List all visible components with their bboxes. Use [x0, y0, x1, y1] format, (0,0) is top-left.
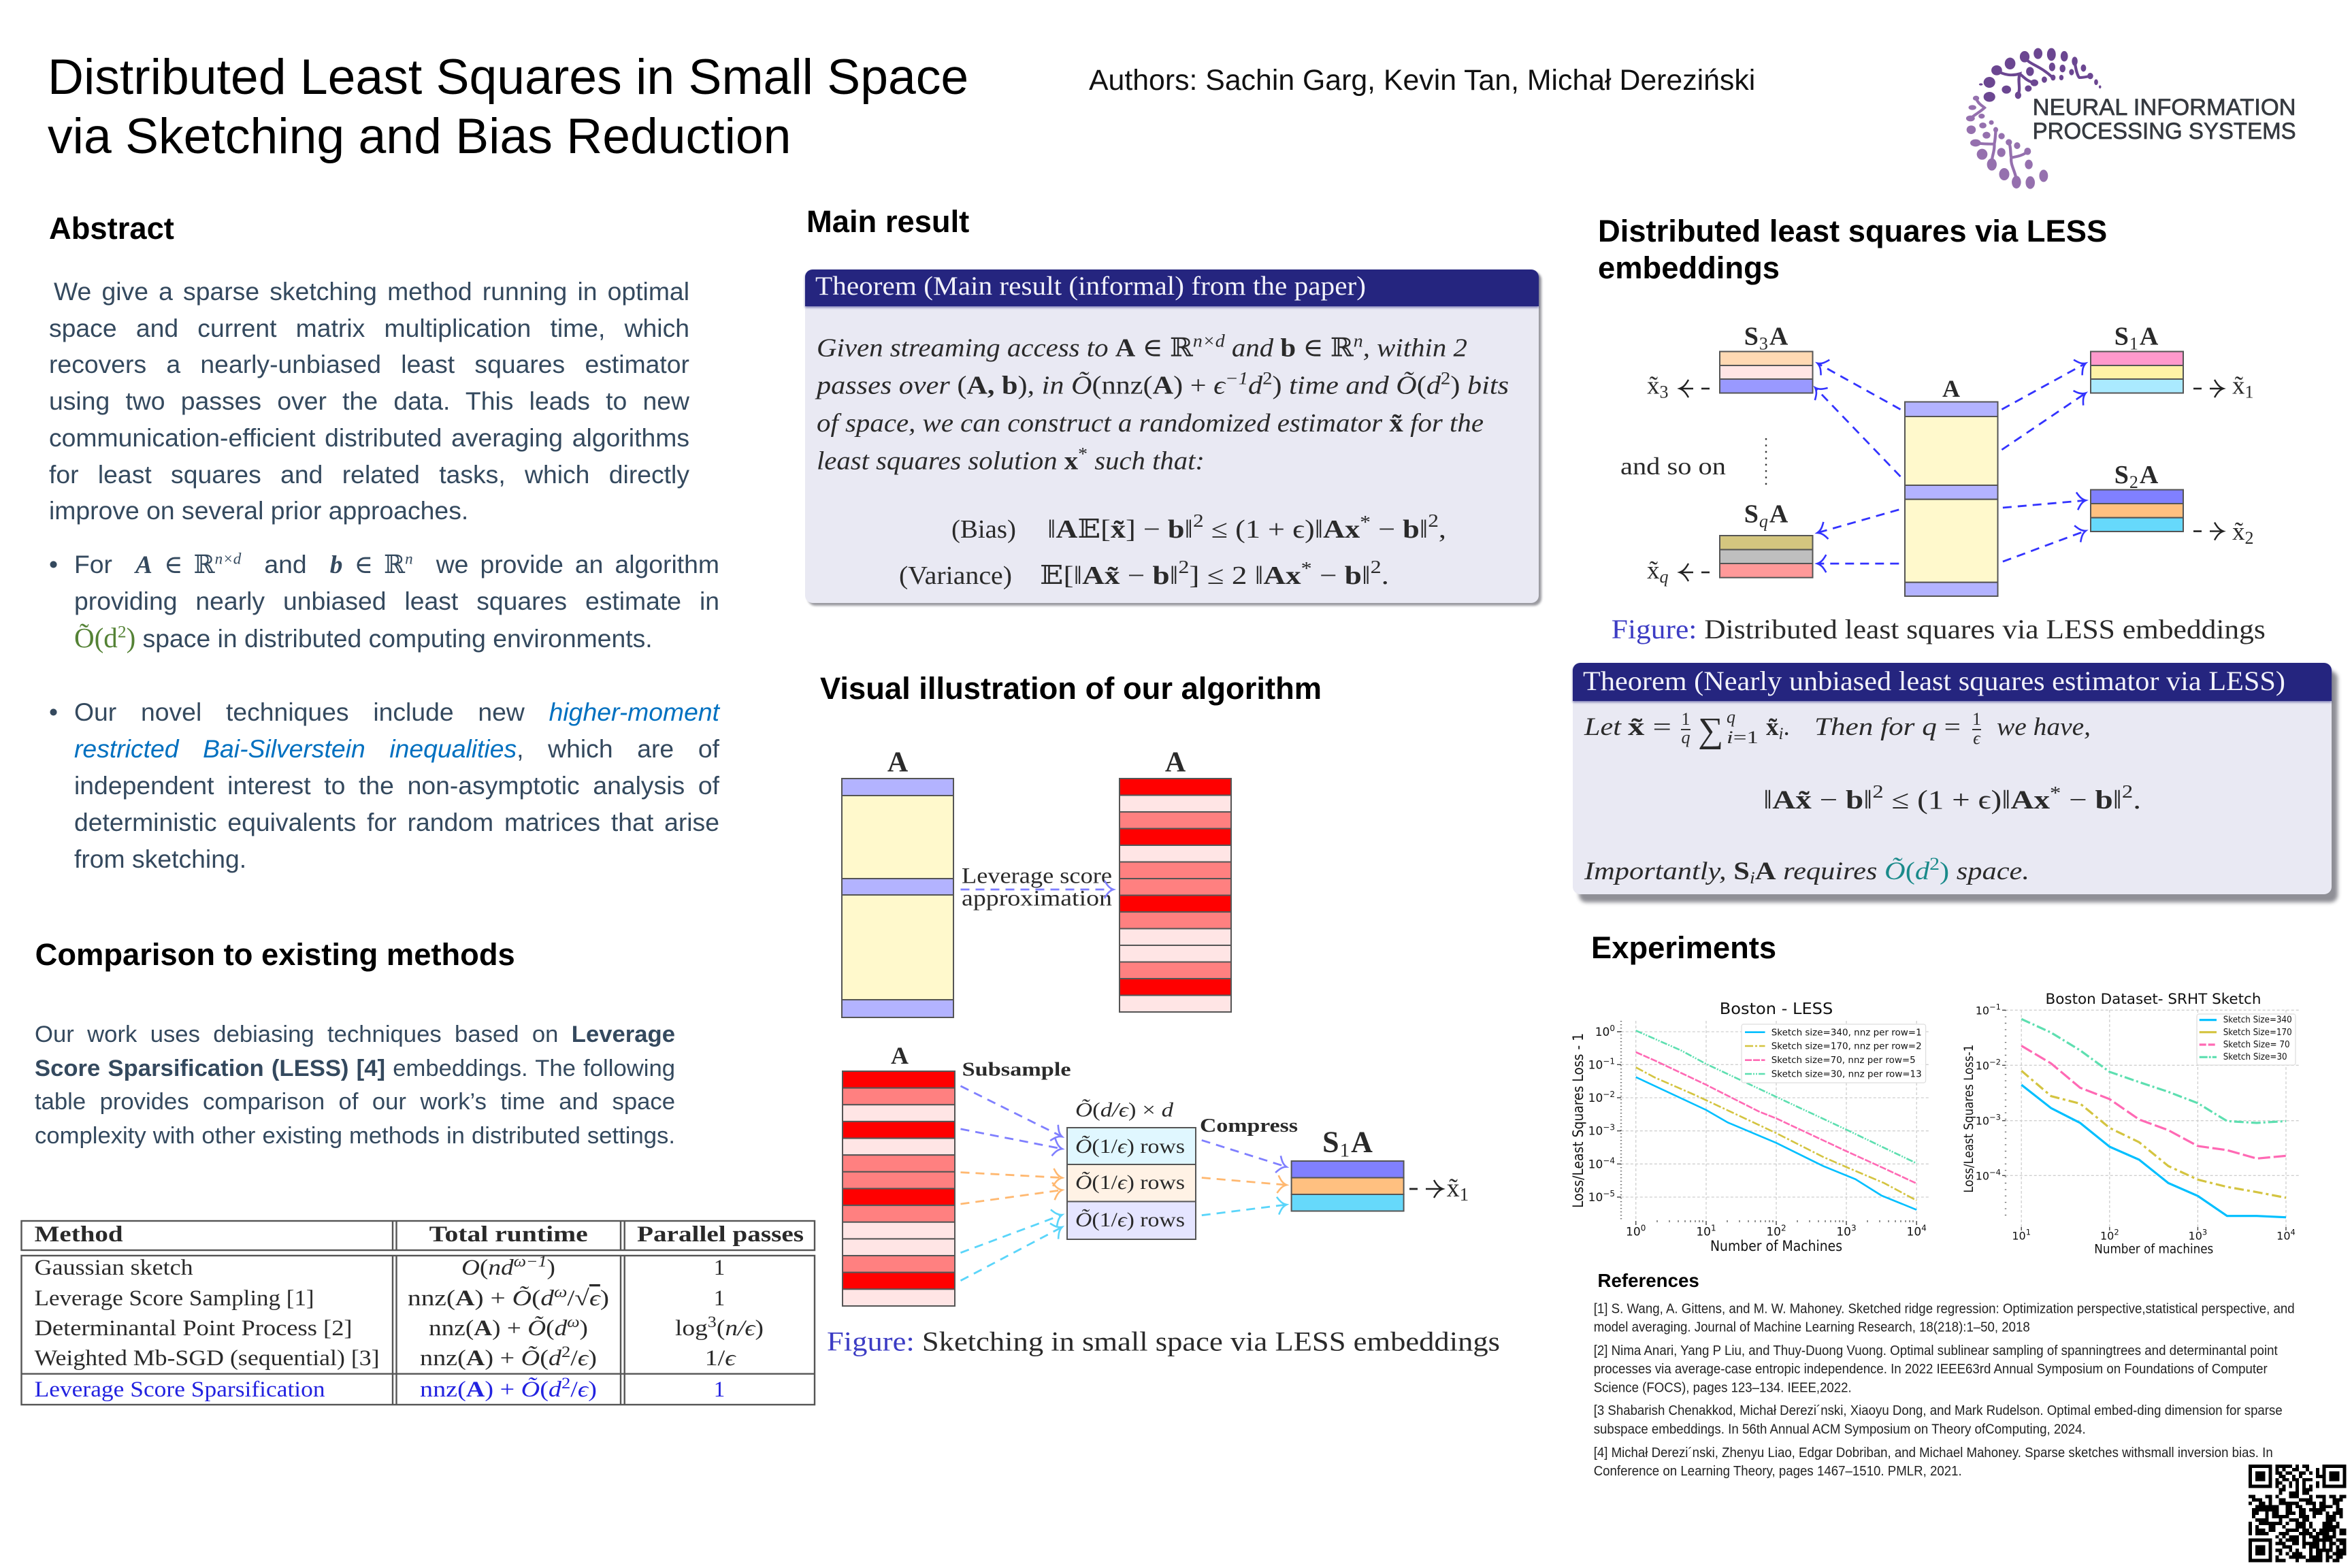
chart 2 legend: Sketch Size=30 [2223, 1052, 2287, 1062]
intermediate sketch rows: Õ(1/ϵ) rows [1075, 1171, 1185, 1194]
figure: leverage score approximation [841, 747, 1232, 1018]
theorem text: ≤ (1 + ϵ)‖ [1884, 785, 2010, 815]
chart 1 axis labels and ticks: 10 [1626, 1226, 1641, 1239]
theorem text: Let [1584, 713, 1622, 741]
chart 1 axis labels and ticks: 10 [1595, 1026, 1610, 1039]
table body rows: ) [547, 1256, 555, 1280]
intermediate sketch rows: Õ(1/ϵ) rows [1075, 1209, 1185, 1231]
sketch S3A: S [1744, 323, 1759, 351]
theorem text: Ax [1263, 561, 1301, 590]
sketch S2A: S [2114, 461, 2129, 489]
icon: QR code [2249, 1465, 2347, 1563]
chart 2 axis labels and ticks: 10 [2012, 1230, 2026, 1243]
theorem text: , [1439, 515, 1446, 544]
theorem text: i=1 [1727, 728, 1759, 747]
figure: distributed LESS [1620, 323, 2254, 597]
theorem text: q [1727, 707, 1735, 727]
theorem text: Ax [2010, 785, 2051, 815]
table body rows: ϵ) [578, 1346, 595, 1371]
theorem text: 𝔼[‖ Ax̃ − b‖ [1040, 561, 1177, 590]
table header row: Total runtime [429, 1222, 588, 1247]
reference 4: Conference on Learning Theory, pages 1467–1510. PMLR, 2021. [1594, 1464, 1962, 1479]
logo mark: purple dots [1966, 48, 2101, 189]
theorem text: 1 [1972, 709, 1981, 729]
chart 1 legend [1742, 1024, 1926, 1083]
table body rows [35, 1253, 764, 1371]
output estimators: 3 [1659, 382, 1669, 402]
sketch SqA: A [1769, 500, 1788, 529]
theorem text: n×d [1193, 331, 1226, 351]
theorem text: ≤ (1 + ϵ)‖ [1204, 515, 1323, 544]
output estimators: 1 [2244, 382, 2254, 402]
reference 2: Science (FOCS), pages 123–134. IEEE,2022. [1594, 1381, 1852, 1396]
theorem text: space. [1955, 858, 2019, 885]
title [48, 49, 968, 164]
chart 1 axis labels and ticks: 3 [1851, 1224, 1857, 1233]
theorem text: A [1755, 858, 1776, 885]
sketch SqA [1720, 500, 1813, 578]
theorem text: − [1312, 561, 1345, 590]
chart: Boston SRHT [1962, 991, 2299, 1257]
theorem text: −1 [1225, 369, 1248, 389]
theorem text: 2 [1428, 510, 1439, 531]
chart 2 axis labels and ticks: 10 [2189, 1230, 2202, 1243]
table rules [22, 1221, 815, 1405]
matrix A colored by leverage score: A [1165, 747, 1186, 779]
chart 1 axis labels and ticks: 10 [1588, 1158, 1603, 1171]
table body rows: 1 [714, 1286, 725, 1311]
chart 1 axis labels and ticks: 0 [1610, 1024, 1615, 1033]
theorem text: 2 [1441, 369, 1450, 389]
sketch S3A: 3 [1759, 333, 1768, 354]
label and arrow: leverage score approximation [961, 864, 1112, 911]
sketch S3A [1720, 323, 1813, 393]
theorem text: * [1301, 558, 1312, 578]
sketch S1A: 1 [2129, 333, 2138, 354]
theorem text: Theorem (Nearly unbiased least squares estimator via LESS) [1583, 666, 2285, 696]
table body rows: ( [717, 1316, 725, 1341]
chart 2 legend: Sketch Size=340 [2223, 1015, 2292, 1026]
intermediate sketch rows: Õ(1/ϵ) rows [1075, 1135, 1185, 1158]
theorem text: ] ≤ 2 ‖ [1189, 561, 1263, 590]
theorem text: 2 [2122, 781, 2133, 802]
matrix A rows: A [891, 1042, 909, 1069]
chart 1 axis labels and ticks: 10 [1836, 1226, 1851, 1239]
bullet: novel techniques: from sketching. [74, 845, 246, 873]
theorem text: , within 2 [1363, 334, 1467, 363]
logo: neural information processing systems [1965, 48, 2296, 189]
logo text [2033, 95, 2296, 144]
sketch S1A: S [1322, 1126, 1339, 1159]
bullet: algorithm result [49, 550, 719, 653]
chart 1 axis labels and ticks: 10 [1588, 1092, 1603, 1105]
reference 4: [4] Michał Derezi´nski, Zhenyu Liao, Edgar Dobriban, and Michael Mahoney. Sparse sketches withsmall inversion bias. In [1594, 1446, 2273, 1460]
bullet: algorithm result: Õ(d2) space in distributed computing environments. [74, 621, 653, 653]
chart: Boston LESS [1570, 1000, 1929, 1254]
sketch S2A: 2 [2129, 472, 2138, 492]
output estimator x1: x̃ [1447, 1174, 1460, 1203]
theorem header [805, 270, 1539, 306]
intermediate sketch rows [1067, 1098, 1196, 1239]
chart 2 axis labels and ticks: 10 [2276, 1230, 2291, 1243]
figure caption: distributed: Figure: Distributed least squares via LESS embeddings [1612, 614, 2266, 644]
theorem text: bits [1467, 372, 1504, 400]
reference 2: processes via average-case entropic independence. In 2022 IEEE63rd Annual Symposium on Foundations of Computer [1594, 1362, 2268, 1377]
chart 2 axis labels and ticks: −3 [1989, 1113, 2001, 1122]
chart 1 axis labels and ticks: 10 [1907, 1226, 1921, 1239]
chart 2 legend: Sketch Size=170 [2223, 1028, 2292, 1038]
panel: main theorem [805, 270, 1539, 603]
text block: comparison: table provides comparison of our work’s time and space [35, 1089, 675, 1115]
chart 2 axis labels and ticks: 1 [2026, 1228, 2031, 1237]
theorem text: Given streaming access to A ∈ ℝ [817, 334, 1190, 363]
theorem text: d [1248, 372, 1263, 400]
central matrix A [1905, 375, 1998, 596]
chart 2 axis labels and ticks: −1 [1989, 1002, 2001, 1011]
theorem text: − [2061, 785, 2095, 815]
label and arrow: leverage score approximation: Leverage score [962, 864, 1112, 889]
text block: comparison [35, 1022, 675, 1149]
output estimators [1647, 372, 2254, 587]
chart 2 axis labels and ticks: 3 [2202, 1228, 2207, 1237]
table body rows: Weighted Mb-SGD (sequential) [3] [35, 1346, 380, 1371]
heading: abstract: Abstract [49, 211, 174, 246]
chart 2 legend [2197, 1014, 2296, 1065]
table body rows: nnz( A) + Õ(d [420, 1346, 559, 1371]
intermediate sketch rows: Õ(d/ϵ) × d [1075, 1098, 1174, 1122]
sketch S1A: A [1351, 1126, 1373, 1159]
chart 1 lines [1636, 1030, 1916, 1210]
table highlighted row: leverage score sparsification: 2 [561, 1375, 570, 1392]
sketch S1A: 1 [1340, 1140, 1350, 1162]
theorem text: ∑ [1698, 711, 1723, 750]
table body rows: nnz(A) + Õ(d [429, 1316, 566, 1341]
table body rows: ) [580, 1316, 588, 1341]
logo text: PROCESSING SYSTEMS [2033, 118, 2296, 144]
figure caption: sketching: Figure: Sketching in small space via LESS embeddings [827, 1326, 1500, 1357]
reference 2: [2] Nima Anari, Yang P Liu, and Thuy-Duong Vuong. Optimal sublinear sampling of spanningtrees and determinantal point [1594, 1343, 2278, 1358]
theorem text: x̃ [1766, 713, 1779, 741]
table header row: Method [35, 1222, 123, 1247]
text block: abstract [49, 277, 689, 525]
theorem text: 2 [1929, 854, 1940, 874]
theorem text: b ∈ ℝ [1280, 334, 1350, 363]
table body rows: Leverage Score Sampling [1] [35, 1286, 314, 1311]
table body rows: 2 [561, 1343, 570, 1360]
chart 2 lines [2021, 1019, 2286, 1218]
chart 1 grid and axes [1617, 1021, 1929, 1225]
text block: abstract: for least squares and related tasks, which directly [49, 460, 689, 489]
theorem text: 1 [1681, 709, 1690, 729]
bullet: novel techniques [49, 698, 720, 873]
theorem text: Theorem (Main result (informal) from the paper) [815, 272, 1366, 301]
chart 2 axis labels and ticks: 10 [1976, 1004, 1989, 1017]
output estimators: x̃ [2232, 372, 2245, 400]
compress arrows: Compress [1200, 1115, 1298, 1137]
reference 4 [1594, 1446, 2273, 1479]
authors: Authors: Sachin Garg, Kevin Tan, Michał Dereziński [1089, 64, 1755, 97]
sketch S3A: A [1769, 323, 1788, 351]
matrix A with highlighted rows [842, 747, 953, 1017]
table highlighted row: leverage score sparsification: ϵ) [578, 1377, 595, 1402]
table body rows: Determinantal Point Process [2] [35, 1316, 353, 1341]
chart 1 legend: Sketch size=340, nnz per row=1 [1771, 1028, 1922, 1039]
theorem header [1573, 663, 2332, 701]
output estimators: x̃ [1647, 372, 1660, 400]
theorem text: x̃ = [1628, 713, 1671, 741]
table highlighted row: leverage score sparsification: / [570, 1377, 578, 1402]
text block: abstract: using two passes over the data. This leads to new [49, 387, 689, 415]
table body rows: 3 [708, 1313, 717, 1330]
theorem text: − [1371, 515, 1403, 544]
chart 1 axis labels and ticks: 1 [1711, 1224, 1716, 1233]
output estimators: x̃ [1647, 557, 1660, 585]
table highlighted row: leverage score sparsification [35, 1375, 725, 1402]
chart 1 axis labels and ticks: Number of Machines [1710, 1238, 1842, 1254]
chart 1 axis labels and ticks: −2 [1603, 1090, 1615, 1099]
subsample arrows [961, 1059, 1071, 1281]
sketch S1A: A [2140, 323, 2159, 351]
central matrix A: A [1942, 375, 1960, 402]
text block: comparison: complexity with other existing methods in distributed settings. [35, 1123, 675, 1149]
subsample arrows: Subsample [962, 1059, 1071, 1081]
reference 1: [1] S. Wang, A. Gittens, and M. W. Mahoney. Sketched ridge regression: Optimization perspective,statistical perspective, and [1594, 1301, 2295, 1316]
text block: comparison: Our work uses debiasing techniques based on Leverage [35, 1022, 675, 1047]
output estimators: x̃ [2232, 518, 2245, 546]
bullet: novel techniques: Our novel techniques include new higher-moment [74, 698, 719, 726]
table body rows: nnz( A) + Õ(d [408, 1286, 552, 1311]
table body rows: ω−1 [514, 1253, 547, 1270]
text block: abstract: We give a sparse sketching method running in optimal [54, 277, 689, 306]
theorem text: b‖ [2095, 785, 2121, 815]
chart 1 axis labels and ticks: 10 [1588, 1191, 1603, 1205]
heading: main result: Main result [806, 204, 969, 239]
chart 2 grid and axes [2002, 1010, 2300, 1230]
table highlighted row: leverage score sparsification: 1 [714, 1377, 725, 1402]
sketch S1A [1292, 1126, 1404, 1211]
matrix A rows [843, 1042, 955, 1306]
theorem text: ) [1450, 372, 1460, 400]
reference list [1594, 1301, 2295, 1479]
sketch S1A: S [2114, 323, 2129, 351]
bullet: novel techniques: restricted Bai-Silverstein inequalities, which are of [74, 734, 719, 763]
theorem text: of space, we can construct a randomized estimator x̃ for the [817, 409, 1484, 438]
theorem text: Ax [1323, 515, 1360, 544]
theorem text: 2 [1872, 781, 1884, 802]
output estimators: 2 [2244, 528, 2254, 548]
chart 1 axis labels and ticks: 0 [1641, 1224, 1646, 1233]
chart 1 axis labels and ticks: Loss/Least Squares Loss - 1 [1570, 1033, 1586, 1208]
theorem text: ‖Ax̃ − b‖ [1763, 785, 1871, 815]
table body rows: ω [567, 1313, 580, 1330]
reference 3: subspace embeddings. In 56th Annual ACM Symposium on Theory ofComputing, 2024. [1594, 1422, 2086, 1437]
chart 2 axis labels and ticks: Loss/Least Squares Loss-1 [1962, 1045, 1976, 1193]
theorem text: ‖A𝔼[x̃] − b‖ [1047, 515, 1192, 544]
heading: experiments: Experiments [1591, 930, 1776, 965]
reference 3 [1594, 1403, 2283, 1437]
chart 1 axis labels and ticks: −4 [1603, 1156, 1615, 1165]
bullet: novel techniques: independent interest to the non-asymptotic analysis of [74, 771, 719, 800]
table body rows: ω [554, 1284, 567, 1301]
matrix A colored by leverage score [1120, 747, 1231, 1012]
theorem text: ϵ [1973, 728, 1981, 748]
table header row: Parallel passes [637, 1222, 804, 1247]
chart 2 axis labels and ticks: 10 [1976, 1059, 1989, 1072]
table header row [35, 1222, 804, 1247]
bullet: novel techniques: • [49, 698, 58, 726]
theorem text: Importantly, S [1584, 858, 1748, 885]
compress arrows [1200, 1115, 1298, 1215]
text block: abstract: improve on several prior approaches. [49, 496, 468, 525]
reference 2 [1594, 1343, 2278, 1396]
output estimators: q [1659, 567, 1669, 587]
chart 2 legend: Sketch Size= 70 [2223, 1040, 2290, 1050]
table highlighted row: leverage score sparsification: nnz( A) + Õ(d [420, 1377, 559, 1402]
reference 1: model averaging. Journal of Machine Learning Research, 18(218):1–50, 2018 [1594, 1320, 2030, 1335]
text block: comparison: Score Sparsification (LESS) [4] embeddings. The following [35, 1055, 675, 1081]
heading: references: References [1598, 1270, 1699, 1290]
text block: abstract: recovers a nearly-unbiased least squares estimator [49, 350, 689, 378]
theorem text [1583, 666, 2285, 887]
distribution arrows [1816, 364, 2085, 564]
logo text: NEURAL INFORMATION [2033, 95, 2296, 120]
theorem text: ) [1940, 858, 1949, 885]
chart 1 axis labels and ticks: 10 [1588, 1058, 1603, 1072]
table body rows: log [675, 1316, 704, 1341]
theorem text: ) [1273, 372, 1282, 400]
table body rows: O(nd [461, 1256, 510, 1280]
theorem text: n [1354, 331, 1363, 351]
chart 2 axis labels and ticks: 2 [2114, 1228, 2119, 1237]
output estimator x1 [1409, 1174, 1469, 1205]
table body rows: n/ϵ) [725, 1316, 763, 1341]
title: via Sketching and Bias Reduction [48, 108, 791, 164]
heading: distributed least squares via LESS embeddings: Distributed least squares via LESS [1598, 214, 2107, 248]
chart 1 axis labels and ticks: 10 [1588, 1125, 1603, 1139]
chart 1 axis labels and ticks [1570, 1024, 1927, 1254]
theorem text: we have, [1997, 713, 2091, 741]
chart 1 axis labels and ticks: 10 [1766, 1226, 1781, 1239]
chart 1 axis labels and ticks: −5 [1603, 1189, 1615, 1198]
theorem text: 2 [1371, 557, 1382, 577]
theorem text: least squares solution x [817, 446, 1077, 475]
theorem text: . [1382, 561, 1389, 590]
chart 1 legend: Sketch size=30, nnz per row=13 [1771, 1069, 1922, 1080]
theorem text: time and Õ (d [1288, 372, 1439, 400]
chart 2 axis labels and ticks: 4 [2291, 1228, 2296, 1237]
output estimator x1: 1 [1460, 1184, 1469, 1205]
theorem text: b‖ [1403, 515, 1426, 544]
theorem text: such that: [1088, 446, 1205, 475]
theorem text: * [1360, 512, 1371, 532]
theorem text: and [1225, 334, 1280, 363]
chart 1 title: Boston - LESS [1720, 1000, 1833, 1018]
theorem text: (Bias) [951, 515, 1016, 544]
chart 2 axis labels and ticks: −4 [1989, 1167, 2001, 1177]
theorem text: 2 [1178, 557, 1189, 577]
chart 2 axis labels and ticks: 10 [2100, 1230, 2114, 1243]
and so on: and so on [1620, 453, 1726, 480]
bullet: algorithm result: For A ∈ ℝn×d and b ∈ ℝn we provide an algorithm [74, 550, 719, 579]
sketch SqA: S [1744, 500, 1759, 529]
chart 1 axis labels and ticks: 10 [1696, 1226, 1711, 1239]
figure: sketching in small space [842, 1042, 1469, 1307]
chart 1 axis labels and ticks: 2 [1781, 1224, 1786, 1233]
chart 2 axis labels and ticks: Number of machines [2094, 1243, 2213, 1257]
reference 1 [1594, 1301, 2295, 1335]
heading: distributed least squares via LESS embeddings: embeddings [1598, 250, 1780, 285]
table body rows: 1/ϵ [705, 1346, 737, 1371]
table body rows: 1 [714, 1256, 725, 1280]
matrix A with highlighted rows: A [887, 747, 909, 779]
comparison table [20, 1220, 815, 1406]
table body rows: / [570, 1346, 578, 1371]
theorem text: Then for q = [1814, 713, 1961, 741]
title: Distributed Least Squares in Small Space [48, 49, 968, 105]
table body rows: Gaussian sketch [35, 1256, 193, 1280]
chart 2 axis labels and ticks: 10 [1976, 1169, 1989, 1182]
sketch S2A [2091, 461, 2183, 532]
chart 1 legend: Sketch size=70, nnz per row=5 [1771, 1055, 1916, 1066]
table highlighted row: leverage score sparsification: Leverage Score Sparsification [35, 1377, 325, 1402]
bullet: algorithm result: • [49, 550, 58, 578]
chart 2 title: Boston Dataset- SRHT Sketch [2046, 991, 2261, 1007]
sketch SqA: q [1759, 512, 1768, 532]
text block: abstract: communication-efficient distributed averaging algorithms [49, 423, 689, 452]
table body rows: ϵ) [589, 1286, 608, 1311]
panel: LESS theorem [1573, 663, 2332, 894]
theorem text: i [1750, 869, 1755, 887]
sketch S2A: A [2140, 461, 2159, 489]
theorem text: . [2133, 785, 2141, 815]
theorem text: * [1078, 444, 1088, 463]
bullet: novel techniques: deterministic equivalents for random matrices that arise [74, 808, 719, 836]
theorem text: b‖ [1345, 561, 1369, 590]
sketch S1A [2091, 323, 2183, 393]
chart 2 axis labels and ticks [1962, 1002, 2296, 1257]
table body rows: /√ [567, 1286, 590, 1311]
chart 2 axis labels and ticks: −2 [1989, 1057, 2001, 1066]
theorem text: passes over (A, b), in Õ(nnz(A) + ϵ [817, 372, 1224, 400]
theorem text: 2 [1262, 369, 1273, 389]
theorem text: q [1681, 728, 1690, 747]
theorem text: i [1779, 725, 1783, 743]
theorem text: * [2050, 783, 2061, 803]
theorem text: (Variance) [899, 561, 1012, 590]
chart 1 legend: Sketch size=170, nnz per row=2 [1771, 1041, 1922, 1052]
label and arrow: leverage score approximation: approximation [962, 887, 1112, 911]
theorem text: 2 [1193, 510, 1204, 531]
heading: visual illustration of our algorithm: Visual illustration of our algorithm [820, 671, 1322, 706]
theorem text: . [1783, 713, 1790, 741]
chart 1 axis labels and ticks: 4 [1921, 1224, 1927, 1233]
chart 1 axis labels and ticks: −3 [1603, 1123, 1615, 1132]
chart 2 axis labels and ticks: 10 [1976, 1115, 1989, 1128]
reference 3: [3 Shabarish Chenakkod, Michał Derezi´nski, Xiaoyu Dong, and Mark Rudelson. Optimal embed-ding dimension for sparse [1594, 1403, 2283, 1418]
theorem text [815, 272, 1508, 590]
chart 1 axis labels and ticks: −1 [1603, 1056, 1615, 1066]
theorem text: requires Õ(d [1782, 858, 1927, 885]
text block: abstract: space and current matrix multiplication time, which [49, 314, 689, 342]
heading: comparison to existing methods: Comparison to existing methods [35, 937, 515, 972]
bullet: algorithm result: providing nearly unbiased least squares estimate in [74, 587, 719, 615]
heading: distributed least squares via LESS embeddings [1598, 214, 2107, 285]
